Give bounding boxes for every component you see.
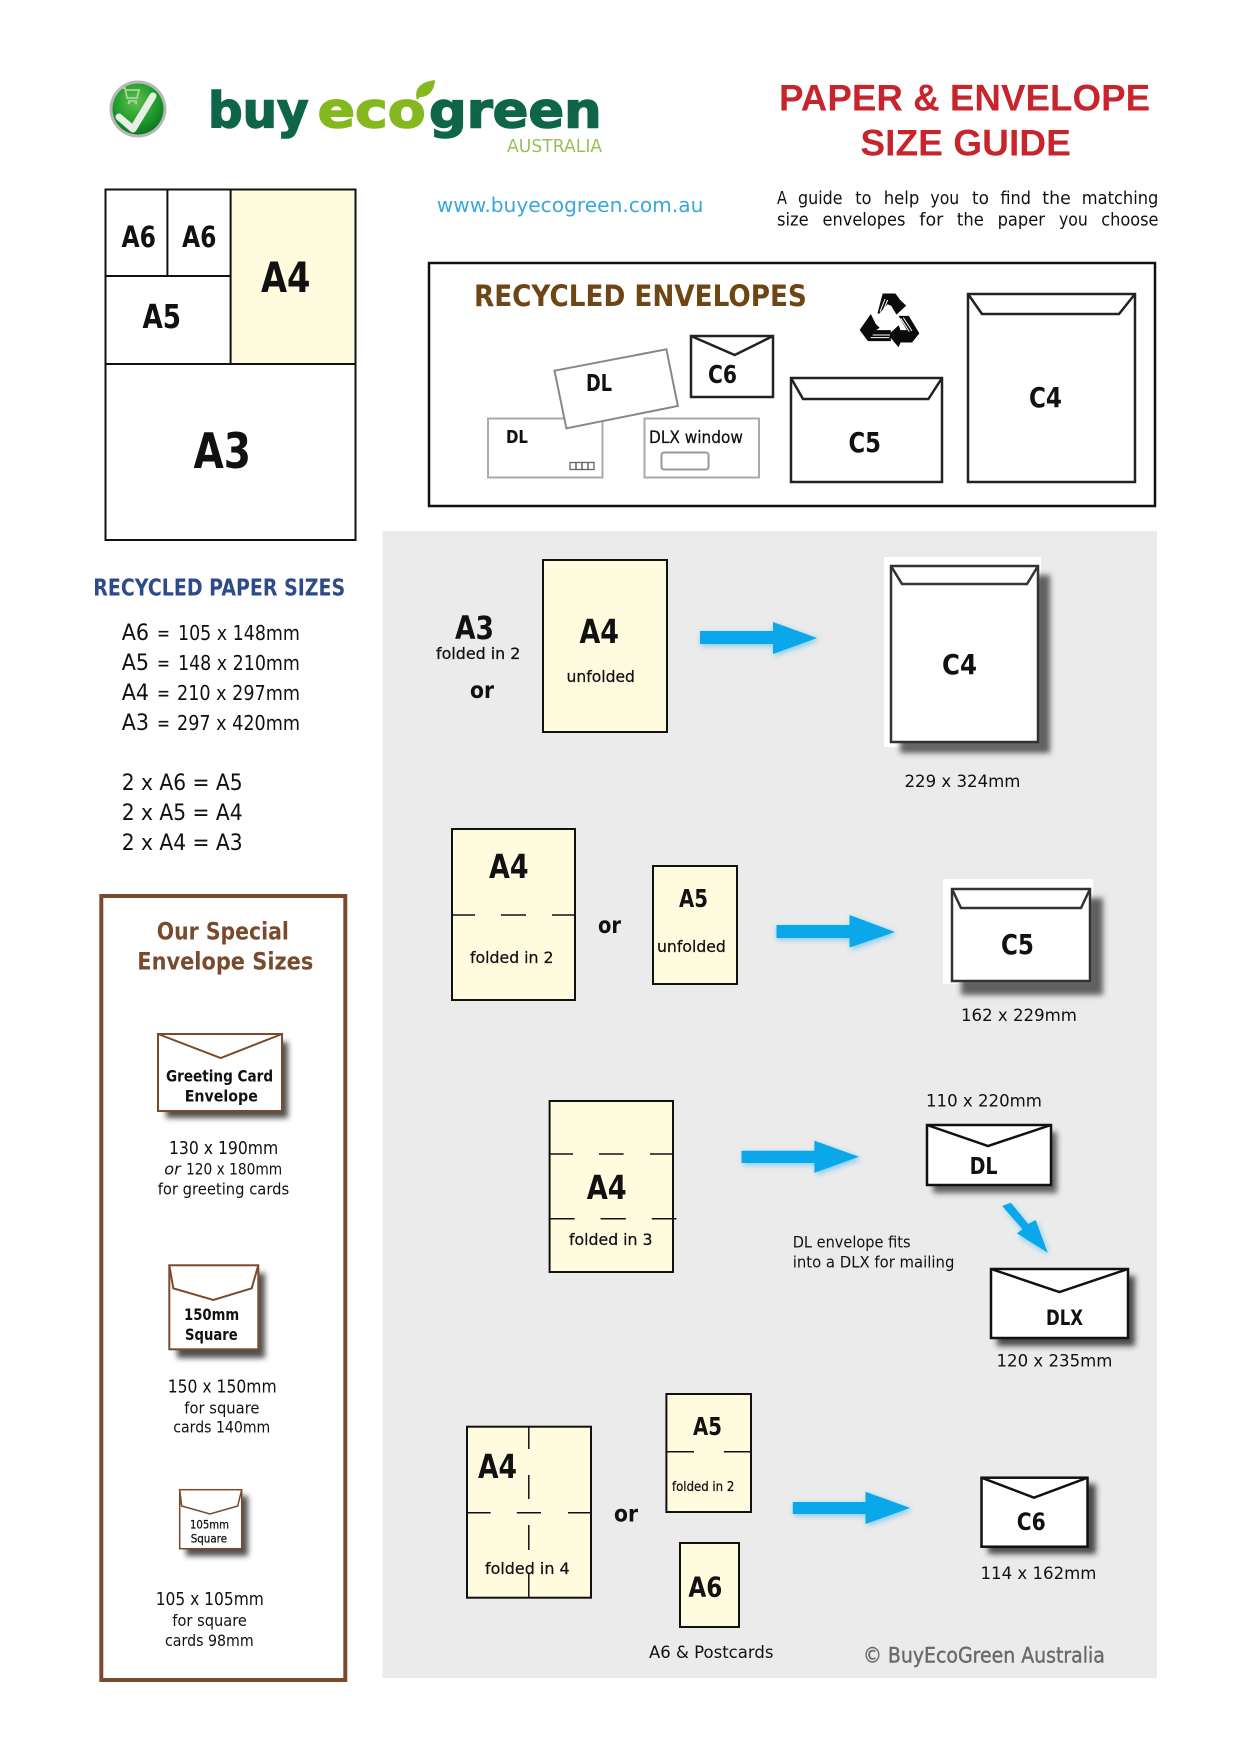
envelope: C6 <box>980 1478 1096 1583</box>
105mm square sizes <box>156 1588 264 1650</box>
intro text: paper <box>998 209 1045 230</box>
logo wordmark: eco <box>318 83 426 140</box>
paper size list: 105 x 148mm <box>178 623 300 645</box>
heading: our special envelope sizes: Envelope Sizes <box>137 948 313 976</box>
intro text: envelopes <box>822 209 905 230</box>
sheet: A4 folded in 4: A4 <box>478 1448 517 1487</box>
intro text: matching <box>1082 187 1158 208</box>
sheet: A4 unfolded: unfolded <box>566 667 635 686</box>
size labels: A4 <box>261 253 310 302</box>
envelope: 150mm square <box>169 1265 265 1358</box>
note: DL into DLX <box>793 1233 954 1272</box>
envelope: greeting card: Greeting Card <box>166 1068 273 1086</box>
title <box>779 78 1150 164</box>
intro text: to <box>855 187 871 208</box>
envelope: 105mm square <box>180 1490 248 1556</box>
envelope: DL rotated back <box>554 349 678 428</box>
paper size diagram <box>106 190 356 540</box>
envelope: C4 <box>968 294 1135 482</box>
intro text <box>777 187 1158 231</box>
envelope: C4: C4 <box>942 650 977 681</box>
row 1: A3 / A4 to C4 <box>436 557 1050 791</box>
envelope: DLX <box>991 1269 1135 1346</box>
sheet: A5 folded in 2: A5 <box>693 1413 722 1442</box>
heading: recycled paper sizes: RECYCLED PAPER SIZES <box>93 574 345 601</box>
envelope: greeting card <box>158 1034 288 1118</box>
sheet: A6: A6 <box>688 1572 722 1604</box>
paper size list <box>122 620 300 855</box>
envelope: C6: 114 x 162mm <box>980 1563 1096 1583</box>
sheet: A4 folded in 4 <box>466 1426 592 1598</box>
paper size list: = <box>157 622 170 646</box>
envelope: C5 <box>791 378 942 482</box>
title: SIZE GUIDE <box>860 122 1071 164</box>
envelope: 105mm square: 105mm <box>190 1518 229 1531</box>
logo wordmark: AUSTRALIA <box>507 137 602 157</box>
heading: our special envelope sizes <box>137 918 313 976</box>
sheet: A4 folded in 3: A4 <box>587 1170 627 1208</box>
or label: or <box>614 1502 638 1528</box>
logo wordmark: green <box>429 82 602 139</box>
envelope: 150mm square: 150mm <box>184 1306 239 1324</box>
envelope: C5: 162 x 229mm <box>961 1005 1077 1025</box>
dimension: DLX: 120 x 235mm <box>996 1351 1112 1371</box>
greeting card sizes: 130 x 190mm <box>169 1137 278 1158</box>
size labels: A6 <box>122 222 156 255</box>
arrow <box>776 915 897 950</box>
sheet: A5 folded in 2: folded in 2 <box>672 1478 734 1494</box>
sheet: A4 folded in 2: folded in 2 <box>470 948 554 967</box>
intro text: the <box>957 209 984 230</box>
sheet: A4 folded in 4: folded in 4 <box>485 1559 570 1578</box>
envelope: DL plain <box>488 418 602 478</box>
sheet: A5 unfolded: A5 <box>679 885 708 914</box>
envelope: C5: C5 <box>848 427 881 459</box>
paper size list: A6 <box>122 620 149 646</box>
note: DL into DLX: DL envelope fits <box>793 1233 911 1252</box>
arrow <box>793 1492 913 1526</box>
greeting card sizes: 120 x 180mm <box>186 1159 282 1179</box>
105mm square sizes: 105 x 105mm <box>156 1588 264 1609</box>
sheet: A4 folded in 3: folded in 3 <box>569 1230 653 1249</box>
caption: A6 and postcards: A6 & Postcards <box>649 1642 773 1662</box>
sheet: A6 <box>680 1543 739 1627</box>
envelope: C4: 229 x 324mm <box>904 771 1020 791</box>
envelope: DL <box>927 1125 1057 1193</box>
sheet: A4 folded in 3 <box>549 1101 676 1272</box>
paper size list: 2 x A4 = A3 <box>122 829 243 855</box>
paper size list: A4 <box>122 680 149 706</box>
intro text: you <box>1059 210 1088 230</box>
paper size list: 148 x 210mm <box>178 653 300 675</box>
row 2: A4 / A5 to C5 <box>451 829 1103 1025</box>
heading: our special envelope sizes: Our Special <box>157 918 289 946</box>
envelope: C6 <box>691 336 773 397</box>
paper size list: = <box>157 652 170 676</box>
envelope: C4: C4 <box>1029 381 1062 414</box>
envelope: DL plain: DL <box>506 427 528 447</box>
arrow <box>742 1141 862 1175</box>
intro text: to <box>972 189 989 209</box>
envelope: C5 <box>943 879 1103 1025</box>
row 4: A4 / A5 / A6 to C6 <box>466 1394 1105 1668</box>
size labels <box>122 222 310 480</box>
arrow: DL into DLX <box>1002 1203 1049 1255</box>
intro text: find <box>1000 187 1031 208</box>
sheet: A4 unfolded: A4 <box>580 613 619 652</box>
sheet: A5 unfolded <box>653 866 737 984</box>
intro text: size <box>777 209 809 230</box>
row 3: A4 folded in 3 to DL and DLX <box>549 1091 1135 1371</box>
envelope: C4 <box>884 557 1050 791</box>
envelope: C6: C6 <box>1017 1508 1046 1536</box>
logo: buyecogreen Australia <box>110 80 602 157</box>
envelope: 150mm square: Square <box>185 1326 238 1344</box>
note: DL into DLX: into a DLX for mailing <box>793 1253 954 1272</box>
envelope: DL rotated back: DL <box>586 370 612 397</box>
heading: recycled envelopes: RECYCLED ENVELOPES <box>474 279 807 313</box>
intro text: guide <box>798 187 843 208</box>
150mm square sizes: cards 140mm <box>173 1418 270 1437</box>
intro text: choose <box>1101 209 1158 230</box>
intro text: help <box>884 189 919 209</box>
sheet: A5 folded in 2 <box>665 1394 752 1512</box>
envelope: C5: C5 <box>1001 928 1034 961</box>
envelope: DL: DL <box>970 1153 998 1181</box>
intro text: A <box>777 188 787 208</box>
paper size list: 297 x 420mm <box>177 713 300 735</box>
logo wordmark: buy <box>208 83 309 139</box>
paper size list: 2 x A6 = A5 <box>122 769 243 795</box>
title: PAPER & ENVELOPE <box>779 78 1150 119</box>
150mm square sizes: for square <box>184 1399 260 1417</box>
paper size list: = <box>157 682 170 706</box>
label: A3 folded in 2 <box>436 610 520 704</box>
sheet: A5 unfolded: unfolded <box>657 937 726 956</box>
intro text: for <box>919 211 944 231</box>
arrow <box>700 622 820 656</box>
size labels: A3 <box>194 424 251 480</box>
panel: our special envelope sizes <box>101 896 345 1680</box>
panel: recycled envelopes <box>429 263 1155 506</box>
label: A3 folded in 2: A3 <box>455 610 494 647</box>
paper size list: 210 x 297mm <box>177 683 300 705</box>
or label: or <box>598 913 621 939</box>
150mm square sizes: 150 x 150mm <box>168 1376 277 1397</box>
icon: green check badge <box>110 80 166 138</box>
envelope: DLX window: DLX window <box>649 427 743 447</box>
paper size list: = <box>157 712 170 736</box>
envelope: DLX: DLX <box>1046 1306 1083 1331</box>
copyright: © BuyEcoGreen Australia <box>863 1643 1105 1668</box>
envelope: C6: C6 <box>708 361 737 390</box>
A4 highlighted sheet <box>231 190 356 364</box>
envelope: DLX window <box>644 418 759 478</box>
panel: paper to envelope matching <box>382 531 1157 1678</box>
label: A3 folded in 2: or <box>470 678 494 704</box>
105mm square sizes: for square <box>172 1611 247 1630</box>
greeting card sizes <box>158 1137 289 1198</box>
paper size list: 2 x A5 = A4 <box>122 799 243 825</box>
dimension: DL: 110 x 220mm <box>926 1091 1042 1111</box>
size labels: A6 <box>182 222 216 255</box>
intro text: you <box>930 188 959 208</box>
sheet: A4 folded in 2: A4 <box>489 848 529 887</box>
website url: www.buyecogreen.com.au <box>437 193 703 217</box>
sheet: A4 folded in 2 <box>451 829 576 1000</box>
150mm square sizes <box>168 1376 277 1437</box>
icon: recycling symbol <box>861 294 918 346</box>
envelope: greeting card: Envelope <box>185 1087 258 1106</box>
paper size list: A3 <box>122 710 149 736</box>
intro text: the <box>1042 189 1071 209</box>
sheet: A4 unfolded <box>543 560 667 732</box>
paper size list: A5 <box>122 650 149 676</box>
size labels: A5 <box>142 298 181 337</box>
greeting card sizes: or <box>164 1159 182 1178</box>
logo wordmark <box>208 80 602 157</box>
label: A3 folded in 2: folded in 2 <box>436 644 520 663</box>
105mm square sizes: cards 98mm <box>165 1631 254 1650</box>
envelope: 105mm square: Square <box>191 1532 227 1545</box>
greeting card sizes: for greeting cards <box>158 1180 289 1198</box>
